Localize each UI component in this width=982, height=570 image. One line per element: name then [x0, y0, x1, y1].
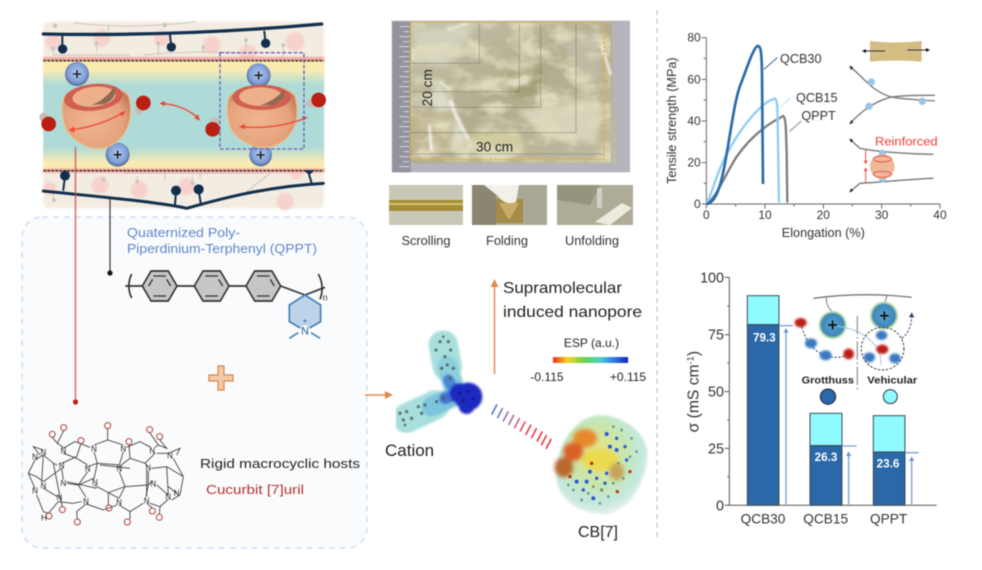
reinforced inset: Reinforced: [875, 134, 938, 148]
cucurbit[7]uril structure: N: [174, 489, 180, 498]
cucurbit[7]uril structure: N: [60, 446, 66, 455]
axis labels: 75: [708, 328, 724, 344]
curve labels: QCB30: [780, 52, 822, 66]
cucurbit[7]uril structure: N: [91, 445, 97, 454]
arrow to cation: [365, 394, 391, 396]
axis labels: σ (mS cm: [685, 364, 702, 432]
tick labels: 20: [817, 208, 830, 222]
nanopore arrow: [494, 281, 496, 374]
interaction dashes: [492, 405, 551, 448]
cucurbit[7]uril structure: N: [59, 461, 65, 470]
CB[7] label: CB[7]: [578, 524, 618, 541]
cucurbit[7]uril structure: N: [85, 465, 91, 474]
nanopore caption: [503, 280, 642, 321]
QPPT repeat unit structure: n: [323, 293, 328, 303]
cucurbit[7]uril structure: N: [60, 479, 66, 488]
tick labels: 0: [694, 197, 701, 211]
cucurbit[7]uril structure: N: [144, 496, 150, 505]
cucurbit[7]uril structure: N: [32, 452, 38, 461]
cucurbit[7]uril structure: H: [41, 514, 47, 523]
tick labels: 0: [703, 208, 710, 222]
black leader line: [107, 197, 113, 276]
tick labels: 40: [687, 114, 701, 128]
dashed chemistry panel: [22, 217, 367, 548]
axes: [702, 38, 940, 209]
axis labels: [685, 270, 724, 514]
tensile chart: Elongation (%): [782, 226, 865, 240]
cucurbit[7]uril structure: N: [56, 494, 62, 503]
mechanism legend: [802, 375, 918, 404]
cucurbit[7]uril structure: N: [40, 481, 46, 490]
QPPT repeat unit structure: [125, 271, 328, 338]
axes: [725, 277, 937, 505]
axis titles: Tensile strength (MPa): [665, 57, 679, 184]
cucurbit[7]uril structure: N: [145, 464, 151, 473]
host name: Cucurbit [7]uril: [206, 482, 304, 497]
crack inset: [849, 66, 935, 124]
macrocycle host left: [62, 81, 131, 149]
gray shadow ions: [39, 99, 315, 126]
QCB30 curve: [706, 46, 763, 204]
curve labels: QPPT: [801, 109, 836, 123]
tick labels: 30: [875, 208, 889, 222]
folding photo: [472, 185, 547, 248]
bar values: 23.6: [877, 457, 900, 470]
axis labels: 0: [716, 498, 724, 514]
strip inset: [862, 41, 930, 62]
ESP colour legend: ESP (a.u.): [564, 336, 619, 350]
tick labels: 60: [687, 72, 701, 86]
ESP colour legend: -0.115: [530, 370, 564, 384]
axis labels: -1: [686, 356, 696, 364]
panel divider: [656, 10, 658, 540]
curve labels: QCB15: [796, 91, 838, 105]
host label: Rigid macrocyclic hosts: [200, 456, 360, 471]
QPPT repeat unit structure: +: [303, 316, 308, 325]
tick labels: 10: [758, 208, 772, 222]
folding photo: Folding: [486, 233, 528, 248]
proton transport inset: [795, 295, 914, 389]
large membrane photo: 20 cm: [420, 69, 435, 106]
Grotthuss level arrows: [779, 326, 919, 504]
bars: [747, 296, 905, 505]
mechanism legend: Vehicular: [867, 375, 918, 386]
QCB15 curve: [706, 99, 779, 204]
large membrane photo: 30 cm: [476, 140, 513, 155]
axis labels: ): [685, 351, 702, 356]
tick labels: [687, 31, 947, 222]
axis labels: 100: [700, 270, 724, 286]
bar values: 79.3: [753, 332, 776, 345]
cucurbit[7]uril structure: N: [165, 492, 171, 501]
category labels: [741, 511, 908, 526]
cucurbit[7]uril structure: N: [32, 486, 38, 495]
axis labels: 50: [708, 385, 724, 401]
cucurbit[7]uril structure: N: [167, 451, 173, 460]
cation spheres: [65, 62, 272, 167]
scrolling photo: Scrolling: [401, 233, 451, 248]
tick labels: 20: [687, 156, 701, 170]
red leader line: [73, 147, 78, 405]
tick labels: 80: [687, 31, 701, 45]
curve labels: [764, 52, 838, 132]
reinforced inset: [849, 134, 938, 193]
cation ESP model: [398, 335, 482, 426]
cucurbit[7]uril structure: N: [149, 446, 155, 455]
ESP colour legend: +0.115: [610, 370, 646, 384]
conductivity bar chart: [685, 270, 937, 526]
large membrane photo: [392, 21, 630, 172]
QPPT name: [127, 225, 317, 256]
unfolding photo: Unfolding: [565, 233, 619, 248]
cucurbit[7]uril structure: N: [116, 498, 122, 507]
axis labels: 25: [708, 441, 724, 457]
nanopore caption: Supramolecular: [503, 280, 623, 297]
category labels: QPPT: [870, 511, 908, 526]
channel: [43, 61, 324, 171]
cucurbit[7]uril structure: N: [150, 480, 156, 489]
cucurbit[7]uril structure: N: [120, 445, 126, 454]
tick labels: 40: [933, 208, 947, 222]
ruler: [392, 22, 411, 172]
scrolling photo: [389, 185, 463, 248]
cucurbit[7]uril structure: N: [92, 478, 98, 487]
polymer backbones: [43, 24, 323, 208]
cucurbit[7]uril structure: N: [116, 465, 122, 474]
mechanism legend: Grotthuss: [802, 375, 854, 386]
QPPT name: Quaternized Poly-: [127, 225, 240, 240]
nanopore caption: induced nanopore: [503, 304, 642, 321]
QPPT name: Piperdinium-Terphenyl (QPPT): [127, 241, 317, 256]
plus sign: [209, 366, 233, 390]
tensile chart: [665, 31, 947, 240]
exchange arrow: [159, 101, 200, 121]
category labels: QCB15: [803, 511, 848, 526]
QPPT curve: [706, 116, 787, 204]
CB[7] ESP model: [555, 415, 647, 514]
cation label: Cation: [385, 441, 434, 460]
cucurbit[7]uril structure: N: [83, 497, 89, 506]
bar values: [753, 332, 900, 470]
macrocycle host right: [227, 85, 308, 147]
hydroxide ions: [41, 93, 326, 137]
membrane schematic panel: [39, 22, 326, 210]
dashed selection box: [220, 53, 304, 149]
bar values: 26.3: [815, 451, 838, 464]
QPPT repeat unit structure: N: [301, 325, 309, 337]
cucurbit[7]uril structure: [28, 423, 183, 525]
unfolding photo: [557, 185, 633, 248]
ESP colour legend: [530, 336, 646, 384]
cucurbit[7]uril structure: N: [40, 448, 46, 457]
category labels: QCB30: [741, 511, 786, 526]
